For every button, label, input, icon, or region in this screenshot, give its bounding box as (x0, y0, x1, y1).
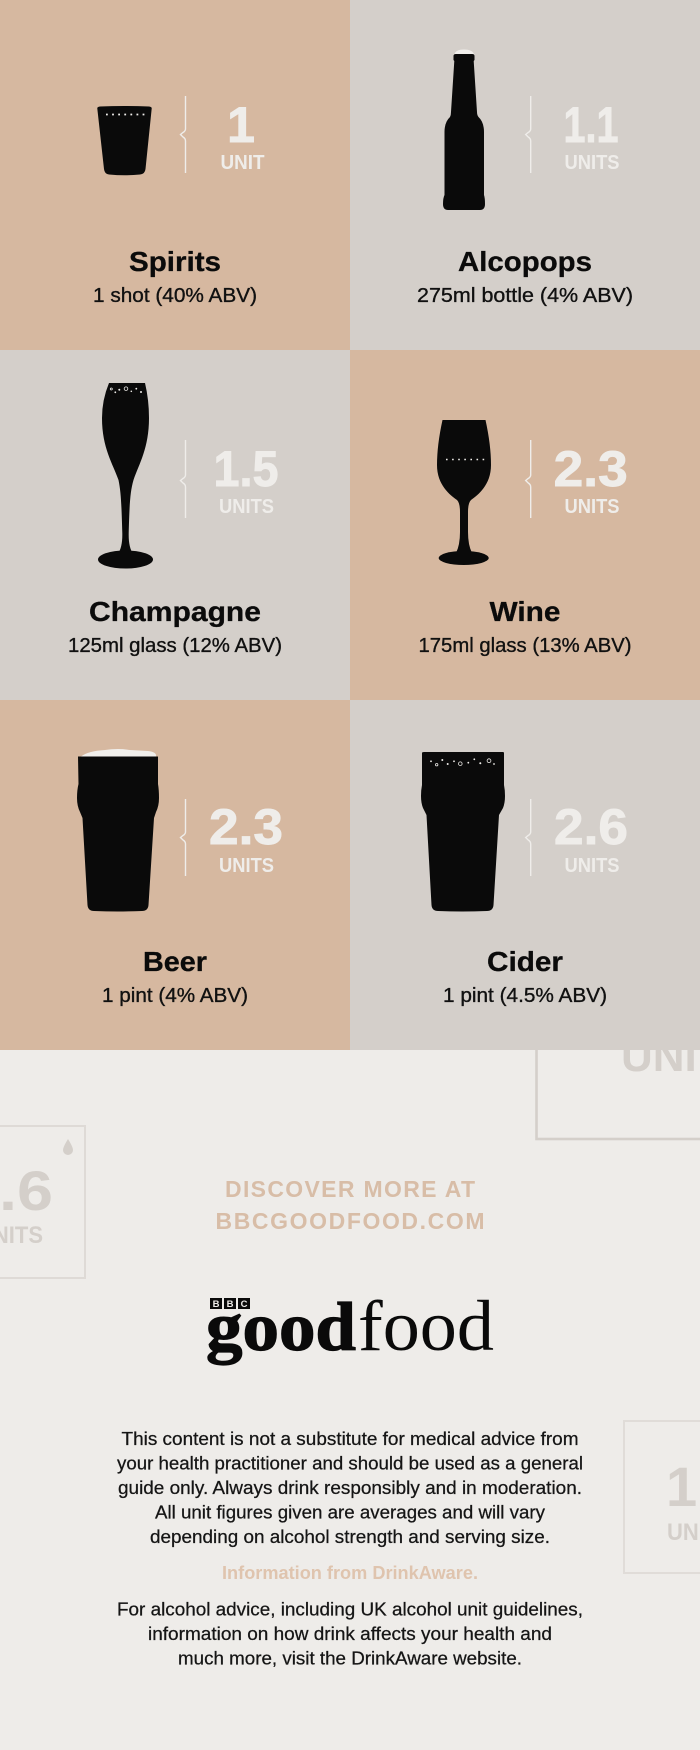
unit count (564, 97, 620, 174)
unit count: UNITS (564, 855, 620, 877)
unit count (214, 441, 278, 518)
panel: wine (350, 350, 700, 700)
logo: BBC Good Food: good (206, 1289, 356, 1365)
call to action heading (216, 1176, 484, 1234)
disclaimer text: your health practitioner and should be used as a general (117, 1454, 583, 1474)
serving detail: 1 pint (4.5% ABV) (443, 984, 607, 1007)
decorative frame: right unit card (624, 1421, 700, 1573)
icon: beer pint (77, 749, 159, 912)
advice text (117, 1600, 583, 1668)
icon: shot glass (97, 106, 152, 175)
serving detail: 275ml bottle (4% ABV) (417, 284, 633, 307)
bracket (526, 96, 531, 173)
unit count (554, 441, 628, 518)
logo: BBC Good Food (206, 1286, 494, 1366)
panel: beer (0, 700, 350, 1050)
icon: champagne flute (98, 383, 153, 568)
logo: BBC Good Food: B (213, 1299, 220, 1310)
serving detail: 175ml glass (13% ABV) (418, 634, 632, 657)
unit count: 2.3 (554, 441, 628, 497)
advice text: information on how drink affects your health and (148, 1624, 552, 1644)
decorative frame: top right unit card (536, 1020, 700, 1139)
drink name: Spirits (129, 246, 221, 277)
icon: bottle (443, 50, 485, 210)
unit count: 1.1 (564, 97, 618, 153)
icon: wine glass (437, 420, 491, 565)
unit count: 1 (227, 97, 255, 153)
panel: spirits (0, 0, 350, 350)
disclaimer text: This content is not a substitute for medical advice from (122, 1429, 578, 1449)
call to action heading: DISCOVER MORE AT (225, 1176, 475, 1202)
drink name: Champagne (89, 596, 261, 627)
unit count (209, 799, 283, 877)
panel: alcopops (350, 0, 700, 350)
drink name: Cider (487, 946, 563, 977)
serving detail: 1 pint (4% ABV) (102, 984, 248, 1007)
drink name: Beer (143, 946, 207, 977)
logo: BBC Good Food: food (358, 1286, 494, 1366)
serving detail: 125ml glass (12% ABV) (68, 634, 282, 657)
bracket (526, 799, 531, 876)
serving detail: 1 shot (40% ABV) (93, 284, 257, 307)
disclaimer text (117, 1429, 583, 1547)
unit count: 1.5 (214, 441, 278, 497)
unit count (554, 799, 628, 877)
logo: BBC Good Food: B (227, 1299, 234, 1310)
call to action heading: BBCGOODFOOD.COM (216, 1208, 484, 1234)
bracket (180, 799, 186, 876)
unit count: UNITS (564, 496, 620, 518)
disclaimer text: All unit figures given are averages and will vary (155, 1503, 545, 1523)
unit count: UNITS (219, 855, 274, 877)
drink name: Wine (490, 596, 560, 627)
unit count: UNITS (219, 496, 274, 518)
advice text: much more, visit the DrinkAware website. (178, 1648, 522, 1668)
disclaimer text: guide only. Always drink responsibly and in moderation. (118, 1478, 582, 1498)
advice text: For alcohol advice, including UK alcohol unit guidelines, (117, 1600, 583, 1620)
icon: cider pint (421, 752, 505, 912)
unit count (220, 97, 264, 174)
panel: champagne (0, 350, 350, 700)
unit count: UNITS (564, 152, 620, 174)
unit count: 2.3 (209, 799, 283, 855)
bracket (180, 96, 186, 173)
logo: BBC Good Food: C (241, 1299, 248, 1310)
disclaimer text: depending on alcohol strength and serving size. (150, 1527, 550, 1547)
source credit: Information from DrinkAware. (222, 1563, 478, 1583)
unit count: 2.6 (554, 799, 628, 855)
unit count: UNIT (220, 152, 264, 174)
bracket (526, 440, 531, 518)
decorative frame: left unit card (0, 1126, 85, 1278)
panel: cider (350, 700, 700, 1050)
drink name: Alcopops (458, 246, 592, 277)
bracket (180, 440, 186, 518)
